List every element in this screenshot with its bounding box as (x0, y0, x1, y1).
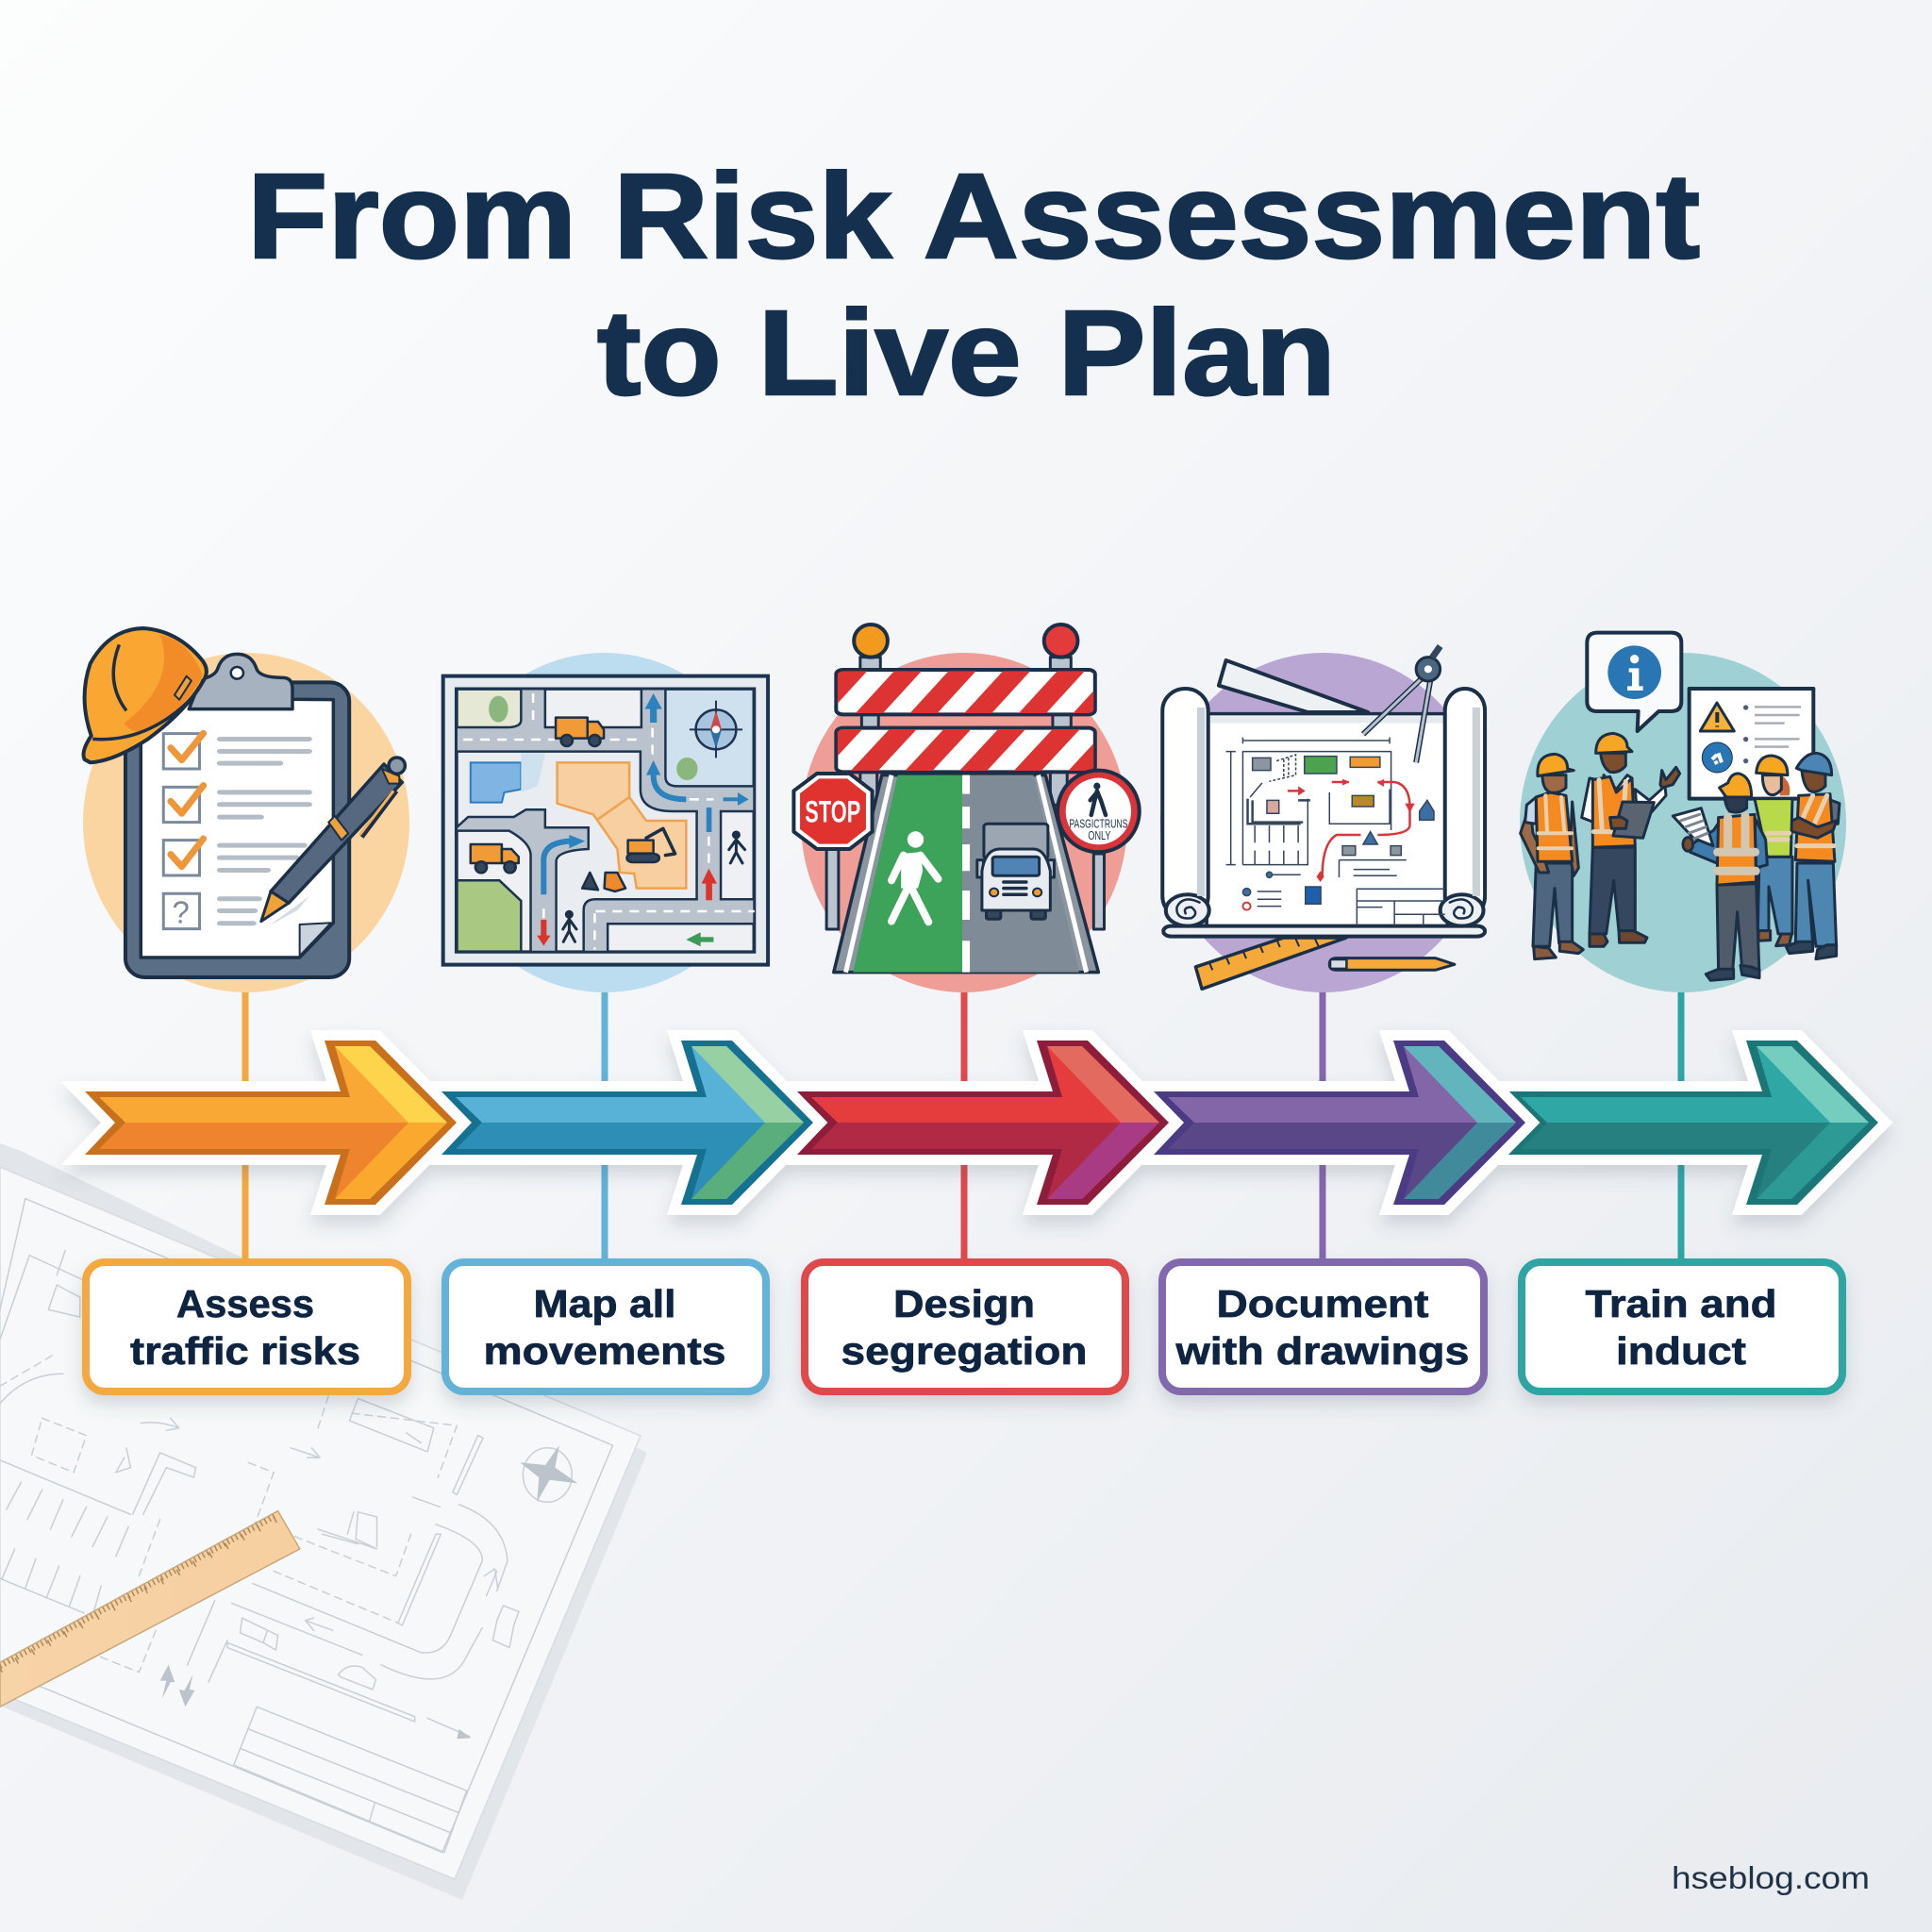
work zone (558, 762, 686, 889)
worker: left (1521, 754, 1583, 959)
red and green arrows (537, 869, 717, 946)
title (247, 149, 1700, 421)
label: map all movements: movements (483, 1329, 726, 1373)
label: design segregation (805, 1262, 1125, 1391)
label: train and induct: Train and (1585, 1282, 1777, 1325)
upper barrier rail (834, 668, 1097, 717)
pedestrians only sign: ONLY (1088, 828, 1111, 842)
label: document with drawings: with drawings (1174, 1329, 1470, 1373)
plan route arrows (1288, 782, 1409, 877)
blue arrows (569, 693, 749, 848)
hard hat (84, 628, 207, 762)
check marks (171, 733, 204, 867)
pedestrian figure (891, 831, 938, 922)
excavator and plant (582, 828, 675, 891)
pen (261, 758, 405, 926)
label: assess traffic risks: Assess (176, 1282, 314, 1325)
stop sign: STOP (805, 795, 860, 829)
text lines (217, 737, 312, 925)
clipboard board (125, 682, 349, 977)
checkboxes (163, 734, 200, 929)
question mark: ? (172, 894, 190, 929)
label: train and induct: induct (1616, 1329, 1746, 1373)
paper fold (300, 923, 331, 956)
compass tool (1363, 646, 1441, 762)
worker: blue hard hat (1786, 753, 1840, 959)
arrow 4: purple (1154, 1041, 1525, 1205)
stop sign (793, 774, 873, 849)
info speech bubble (1587, 633, 1681, 731)
footer: source: hseblog.com (1672, 1860, 1870, 1895)
label: design segregation: Design (893, 1282, 1035, 1325)
barrier connectors and lamps (854, 625, 1077, 728)
pedestrians only sign (1058, 771, 1140, 852)
blueprint sheet (1207, 714, 1447, 927)
label: document with drawings (1162, 1262, 1484, 1391)
pencil (1329, 958, 1455, 970)
label: assess traffic risks: traffic risks (130, 1329, 360, 1373)
map blocks (457, 690, 754, 952)
process arrows (85, 1041, 1878, 1205)
label: assess traffic risks (86, 1262, 408, 1391)
plan colour blocks (1242, 757, 1434, 910)
arrow 5: teal (1507, 1041, 1878, 1205)
step circles (83, 653, 1846, 992)
set square (1219, 660, 1368, 712)
lower barrier rail (834, 726, 1097, 774)
title: to Live Plan (597, 286, 1336, 421)
safety poster (1690, 689, 1813, 799)
vehicle lane (962, 775, 1079, 973)
icon: site movement map (443, 676, 768, 965)
arrow 1: orange (85, 1041, 457, 1205)
arrow 2: blue (441, 1041, 813, 1205)
label: map all movements: Map all (534, 1282, 675, 1325)
pedestrians only sign: PASGICTRUNS (1069, 816, 1128, 830)
pond (471, 762, 521, 803)
pedestrians (563, 832, 745, 941)
icon: traffic plan blueprint (1162, 646, 1485, 989)
title: From Risk Assessment (247, 149, 1700, 284)
worker: presenter with tablet (1582, 733, 1680, 946)
background blueprint sheet with ruler (0, 1143, 647, 1900)
orange ruler (1195, 938, 1346, 989)
truck (977, 824, 1054, 919)
arrow 3: red (797, 1041, 1169, 1205)
worker: woman in hi-vis (1755, 756, 1792, 946)
label: design segregation: segregation (841, 1329, 1087, 1373)
label: document with drawings: Document (1217, 1282, 1429, 1325)
site plan (1226, 738, 1445, 926)
sign posts (826, 771, 1105, 929)
checklist paper (141, 698, 333, 958)
label: train and induct (1522, 1262, 1842, 1391)
trucks (471, 718, 604, 873)
road (834, 775, 1098, 973)
icon: barriers, segregated walkway and road (793, 625, 1141, 973)
icon: team induction (1521, 633, 1840, 980)
compass (690, 701, 742, 758)
worker: back view with document (1673, 774, 1767, 980)
road markings (463, 693, 755, 950)
connector lines (245, 991, 1681, 1264)
green pedestrian lane (853, 775, 962, 973)
clip (189, 654, 292, 709)
label: map all movements (445, 1262, 766, 1391)
drawing rolls (1162, 689, 1485, 937)
icon: clipboard with hard hat and pen (84, 628, 405, 977)
trees (489, 696, 508, 723)
